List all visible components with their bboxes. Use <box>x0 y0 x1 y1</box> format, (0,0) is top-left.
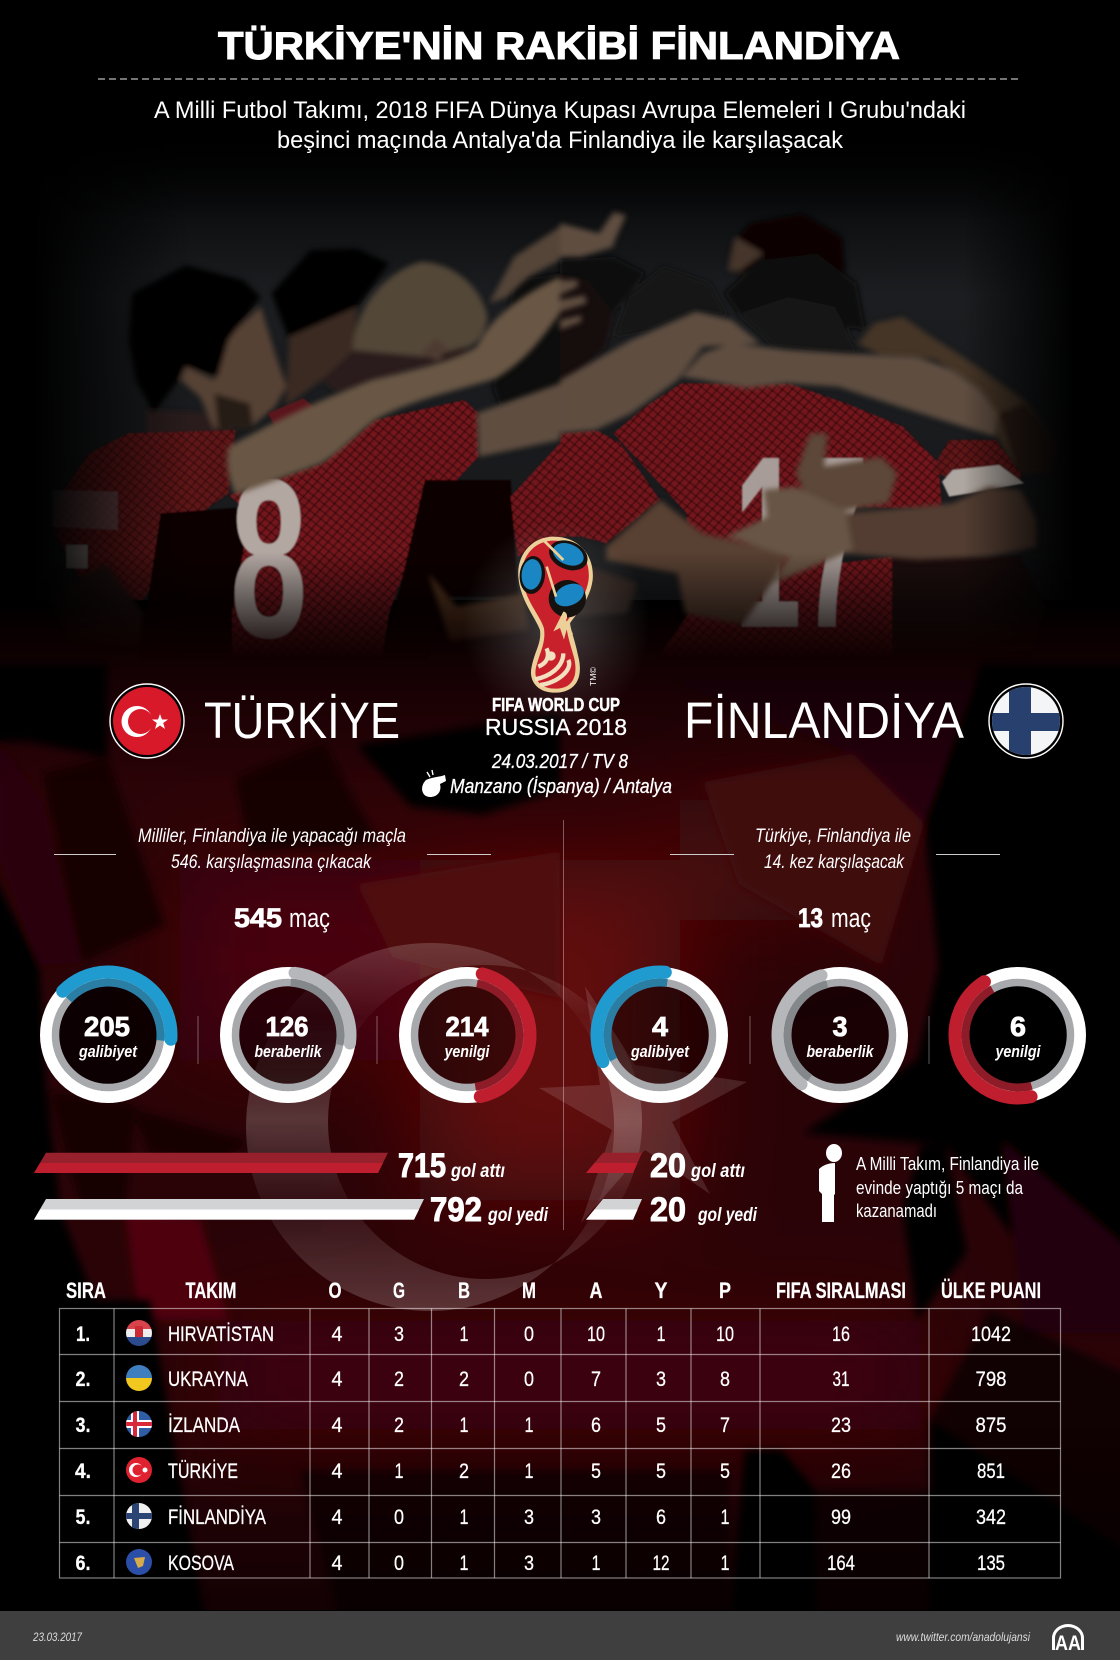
icon: Anadolu Agency logo <box>1052 1624 1084 1655</box>
row 3: İzlanda: 3. <box>76 1414 90 1437</box>
donut: 205 galibiyet: galibiyet <box>78 1042 138 1061</box>
bar: 20 gol yedi: 20 <box>650 1191 686 1229</box>
row 5: Finlandiya: 3 <box>591 1506 601 1529</box>
row 1: Hırvatistan: 4 <box>332 1323 343 1346</box>
row 4: Türkiye: 5 <box>656 1460 666 1483</box>
title: TÜRKİYE'NİN RAKİBİ FİNLANDİYA <box>218 25 900 68</box>
subtitle: beşinci maçında Antalya'da Finlandiya ile karşılaşacak <box>277 127 844 154</box>
intro text: Türkiye <box>54 826 491 873</box>
match count: 545 <box>234 903 330 933</box>
row 5: Finlandiya: 5. <box>76 1506 90 1529</box>
match date and venue: 24.03.2017 / TV 8 <box>491 751 628 773</box>
note text: A Milli Takım, Finlandiya ile <box>856 1153 1039 1174</box>
row 5: Finlandiya: 6 <box>656 1506 666 1529</box>
intro text: Finlandiya: Türkiye, Finlandiya ile <box>755 826 911 847</box>
row 1: Hırvatistan <box>76 1320 1011 1346</box>
row 2: Ukrayna: 2 <box>394 1368 404 1391</box>
row 5: Finlandiya: 342 <box>976 1506 1006 1529</box>
row 2: Ukrayna: 2 <box>459 1368 469 1391</box>
row 6: Kosova: 0 <box>394 1552 404 1575</box>
donut: 6 yenilgi: yenilgi <box>995 1042 1042 1061</box>
donut: 3 beraberlik <box>752 947 928 1123</box>
right shards <box>667 664 1120 1341</box>
donut: 214 yenilgi: yenilgi <box>444 1042 491 1061</box>
icon: standing person <box>819 1144 842 1222</box>
row 3: İzlanda: 4 <box>332 1414 343 1437</box>
team: Türkiye <box>110 684 400 758</box>
row 5: Finlandiya: 4 <box>332 1506 343 1529</box>
jerseys: 17 <box>734 405 868 679</box>
donut: 126 beraberlik: 126 <box>266 1011 308 1042</box>
bar: 792 gol yedi <box>34 1191 549 1229</box>
row 1: Hırvatistan: 1042 <box>971 1323 1011 1346</box>
row 1: Hırvatistan: 0 <box>524 1323 534 1346</box>
row 2: Ukrayna: UKRAYNA <box>168 1368 248 1391</box>
table header: ÜLKE PUANI <box>941 1278 1041 1303</box>
dashed divider <box>98 78 1022 80</box>
intro text: Türkiye: 546. karşılaşmasına çıkacak <box>171 852 372 873</box>
intro text: Finlandiya: 14. kez karşılaşacak <box>764 852 905 873</box>
table header <box>66 1278 1041 1303</box>
row 1: Hırvatistan: 1 <box>656 1323 666 1346</box>
row 4: Türkiye: 2 <box>459 1460 469 1483</box>
row 4: Türkiye: 851 <box>977 1460 1005 1483</box>
team: Finlandiya <box>684 680 1067 762</box>
row 3: İzlanda: 6 <box>591 1414 601 1437</box>
bar: 20 gol yedi <box>586 1191 758 1229</box>
footer <box>0 1611 1120 1660</box>
row 3: İzlanda: İZLANDA <box>168 1414 240 1437</box>
logo: FIFA World Cup Russia 2018 <box>461 520 651 740</box>
donut: 126 beraberlik: beraberlik <box>254 1042 323 1061</box>
row 3: İzlanda <box>76 1411 1006 1437</box>
note text: evinde yaptığı 5 maçı da <box>856 1177 1024 1198</box>
row 1: Hırvatistan: HIRVATİSTAN <box>168 1323 274 1346</box>
row 1: Hırvatistan: 16 <box>832 1323 850 1346</box>
row 6: Kosova <box>76 1549 1005 1575</box>
row 4: Türkiye: 1 <box>394 1460 404 1483</box>
panel: Finlandiya stats <box>576 826 1093 1229</box>
bar: 792 gol yedi: 792 <box>430 1191 482 1229</box>
jersey number 18: 8 <box>230 431 307 685</box>
jerseys <box>54 382 1024 650</box>
row 1: Hırvatistan: 10 <box>587 1323 605 1346</box>
team photo <box>53 192 1053 650</box>
row 6: Kosova: 135 <box>977 1552 1005 1575</box>
table header: SIRA <box>66 1278 106 1303</box>
note text: kazanamadı <box>856 1200 937 1221</box>
table header: O <box>328 1278 342 1303</box>
icon: whistle <box>422 770 446 797</box>
row 3: İzlanda: 23 <box>831 1414 851 1437</box>
row 2: Ukrayna: 4 <box>332 1368 343 1391</box>
row 3: İzlanda: 1 <box>460 1414 468 1437</box>
crowd background <box>75 192 1046 600</box>
match date and venue <box>422 751 672 798</box>
table header: M <box>522 1278 536 1303</box>
row 4: Türkiye: 4. <box>75 1460 91 1483</box>
row 6: Kosova: 3 <box>524 1552 534 1575</box>
icon: Turkey flag <box>126 1457 152 1483</box>
icon: Finland flag <box>126 1503 152 1529</box>
row 3: İzlanda: 5 <box>656 1414 666 1437</box>
panel: Türkiye stats <box>19 826 549 1229</box>
match count: 545: maç <box>289 903 330 933</box>
row 6: Kosova: 4 <box>332 1552 343 1575</box>
row 1: Hırvatistan: 1. <box>76 1323 90 1346</box>
row 2: Ukrayna: 8 <box>720 1368 730 1391</box>
red flag backdrop <box>0 600 1120 1620</box>
donut: 214 yenilgi: 214 <box>446 1011 489 1042</box>
icon: Finnish flag <box>988 683 1064 759</box>
row 3: İzlanda: 875 <box>976 1414 1006 1437</box>
donut: 214 yenilgi <box>391 959 543 1111</box>
row 4: Türkiye: 5 <box>720 1460 730 1483</box>
row 6: Kosova: 1 <box>720 1552 730 1575</box>
bar: 715 gol attı: gol attı <box>450 1161 505 1182</box>
table header: Y <box>654 1278 668 1303</box>
icon: Kosovo flag <box>126 1549 152 1575</box>
row 4: Türkiye: 1 <box>524 1460 534 1483</box>
row 6: Kosova: 12 <box>652 1552 670 1575</box>
standings table <box>60 1278 1060 1578</box>
match count: 13: maç <box>831 903 871 933</box>
row 3: İzlanda: 7 <box>720 1414 730 1437</box>
trophy glow <box>461 520 651 730</box>
row 2: Ukrayna: 31 <box>832 1368 850 1391</box>
icon: Iceland flag <box>126 1411 152 1437</box>
match count: 545: 545 <box>234 903 282 933</box>
icon: Ukraine flag <box>126 1365 152 1391</box>
row 6: Kosova: 1 <box>460 1552 468 1575</box>
row 6: Kosova: 164 <box>827 1552 855 1575</box>
row 5: Finlandiya <box>76 1503 1006 1529</box>
logo wordmark: FIFA WORLD CUP <box>492 695 620 715</box>
row 4: Türkiye: TÜRKİYE <box>168 1460 238 1483</box>
row 2: Ukrayna <box>76 1365 1006 1391</box>
row 6: Kosova: KOSOVA <box>168 1552 234 1575</box>
donut: 3 beraberlik: beraberlik <box>806 1042 875 1061</box>
subtitle <box>154 97 966 154</box>
note text <box>856 1153 1039 1221</box>
flag crescent watermark <box>246 943 747 1311</box>
table header: A <box>590 1278 603 1303</box>
heads <box>129 213 1060 473</box>
match count: 13 <box>798 903 871 933</box>
row 5: Finlandiya: 99 <box>831 1506 851 1529</box>
table header: P <box>719 1278 731 1303</box>
bar: 715 gol attı: 715 <box>398 1147 446 1185</box>
lower shards <box>0 1300 1120 1620</box>
row 2: Ukrayna: 0 <box>524 1368 534 1391</box>
icon: Croatia flag <box>126 1320 152 1346</box>
table header: G <box>393 1278 405 1303</box>
intro text: Finlandiya <box>670 826 1000 873</box>
arms and hands <box>46 212 1037 647</box>
row 2: Ukrayna: 7 <box>591 1368 601 1391</box>
bar: 20 gol yedi: gol yedi <box>697 1205 758 1226</box>
table header: B <box>458 1278 470 1303</box>
row 1: Hırvatistan: 1 <box>460 1323 468 1346</box>
intro text: Türkiye: Milliler, Finlandiya ile yapacağı maçla <box>138 826 406 847</box>
row 4: Türkiye: 5 <box>591 1460 601 1483</box>
row 2: Ukrayna: 798 <box>976 1368 1006 1391</box>
trademark: TM© <box>588 666 598 686</box>
logo: FIFA World Cup Russia 2018: RUSSIA 2018 <box>485 714 627 740</box>
match date and venue: Manzano (İspanya) / Antalya <box>450 776 672 798</box>
donut: 6 yenilgi <box>943 960 1093 1110</box>
row 1: Hırvatistan: 10 <box>716 1323 734 1346</box>
bar: 20 gol attı: 20 <box>650 1147 686 1185</box>
left shards <box>0 664 560 1333</box>
icon: Turkish flag <box>110 684 184 758</box>
footer date: 23.03.2017 <box>32 1630 83 1644</box>
row 5: Finlandiya: 0 <box>394 1506 404 1529</box>
donut: 4 galibiyet <box>576 951 744 1119</box>
heading: Türkiye: TÜRKİYE <box>204 692 400 749</box>
match count: 13: 13 <box>798 903 823 933</box>
row 4: Türkiye: 26 <box>831 1460 851 1483</box>
row 5: Finlandiya: 3 <box>524 1506 534 1529</box>
donut: 205 galibiyet <box>19 946 197 1124</box>
row 3: İzlanda: 1 <box>524 1414 534 1437</box>
bar: 715 gol attı <box>34 1147 505 1185</box>
row 4: Türkiye <box>75 1457 1005 1483</box>
row 5: Finlandiya: 1 <box>460 1506 468 1529</box>
row 2: Ukrayna: 2. <box>76 1368 90 1391</box>
row 1: Hırvatistan: 3 <box>394 1323 404 1346</box>
row 3: İzlanda: 2 <box>394 1414 404 1437</box>
table grid <box>60 1308 1060 1578</box>
row 4: Türkiye: 4 <box>332 1460 343 1483</box>
bar: 20 gol attı: gol attı <box>690 1161 745 1182</box>
donut: 3 beraberlik: 3 <box>832 1011 848 1042</box>
donut: 205 galibiyet: 205 <box>84 1011 130 1042</box>
donut: 4 galibiyet: 4 <box>652 1011 668 1042</box>
table header: TAKIM <box>186 1278 236 1303</box>
row 5: Finlandiya: 1 <box>720 1506 730 1529</box>
row 2: Ukrayna: 3 <box>656 1368 666 1391</box>
icon: Anadolu Agency logo: AA <box>1055 1632 1081 1655</box>
icon: trophy <box>518 535 598 693</box>
donut: 4 galibiyet: galibiyet <box>630 1042 690 1061</box>
footer url: www.twitter.com/anadolujansi <box>896 1630 1030 1644</box>
table header: FIFA SIRALMASI <box>776 1278 906 1303</box>
bar: 792 gol yedi: gol yedi <box>487 1205 549 1226</box>
donut: 6 yenilgi: 6 <box>1010 1011 1026 1042</box>
center divider <box>562 820 564 1230</box>
row 6: Kosova: 6. <box>76 1552 90 1575</box>
bar: 20 gol attı <box>586 1147 745 1185</box>
heading: Finlandiya: FİNLANDİYA <box>684 692 964 749</box>
donut: 126 beraberlik <box>219 966 357 1104</box>
row 5: Finlandiya: FİNLANDİYA <box>168 1506 266 1529</box>
row 6: Kosova: 1 <box>592 1552 600 1575</box>
subtitle: A Milli Futbol Takımı, 2018 FIFA Dünya Kupası Avrupa Elemeleri I Grubu'ndaki <box>154 97 966 124</box>
